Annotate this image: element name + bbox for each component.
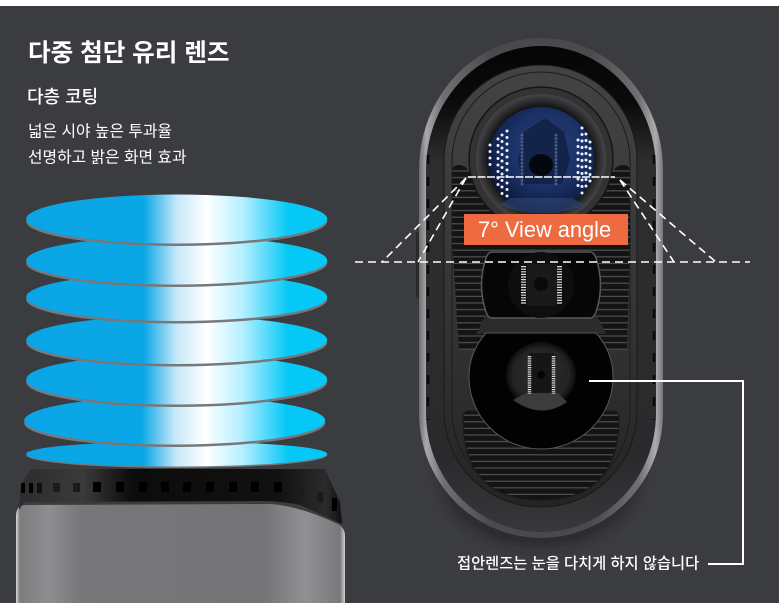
bezel inner ring — [476, 94, 606, 224]
lens stack on device body — [16, 194, 345, 603]
glass disc 1 — [26, 194, 327, 246]
view angle dashed lines — [355, 177, 750, 262]
inner plate line — [452, 72, 630, 500]
lower vent grille — [463, 411, 619, 500]
middle window — [482, 252, 600, 318]
glass disc 4 — [26, 316, 327, 366]
middle lens — [508, 252, 574, 318]
glass disc 5 — [26, 354, 327, 407]
drop shadow — [440, 400, 640, 546]
eyepiece lens — [506, 342, 576, 411]
callout text: 접안렌즈는 눈을 다치게 하지 않습니다 — [457, 556, 699, 572]
description text: 선명하고 밝은 화면 효과 — [28, 148, 186, 166]
description text: 넓은 시야 높은 투과율 — [28, 122, 172, 140]
upper vent grille — [452, 165, 630, 350]
glass inner reflection — [490, 118, 590, 214]
inner plate — [444, 65, 637, 507]
glass disc 3 — [26, 273, 327, 324]
black lens ring — [19, 469, 342, 524]
callout line — [589, 381, 743, 564]
rangefinder device — [416, 38, 663, 546]
objective lens bezel — [469, 87, 613, 231]
view angle label — [464, 214, 628, 245]
device body — [16, 504, 345, 603]
title: 다중 첨단 유리 렌즈 — [28, 39, 230, 67]
view angle label: 7° View angle — [478, 217, 611, 242]
blue glass — [488, 107, 594, 213]
glass disc 2 — [26, 236, 327, 287]
bright dot reflections — [490, 128, 590, 198]
description text — [28, 122, 186, 166]
plate band between windows — [476, 314, 606, 334]
outer silver rim — [419, 38, 663, 538]
subtitle: 다층 코팅 — [27, 87, 98, 107]
side button — [416, 232, 422, 298]
eyepiece window — [469, 333, 613, 449]
glass disc 6 — [24, 396, 325, 447]
dark shell — [426, 46, 656, 532]
side slots — [428, 155, 654, 420]
ring notches — [21, 482, 337, 511]
glass disc 7 — [26, 442, 327, 468]
